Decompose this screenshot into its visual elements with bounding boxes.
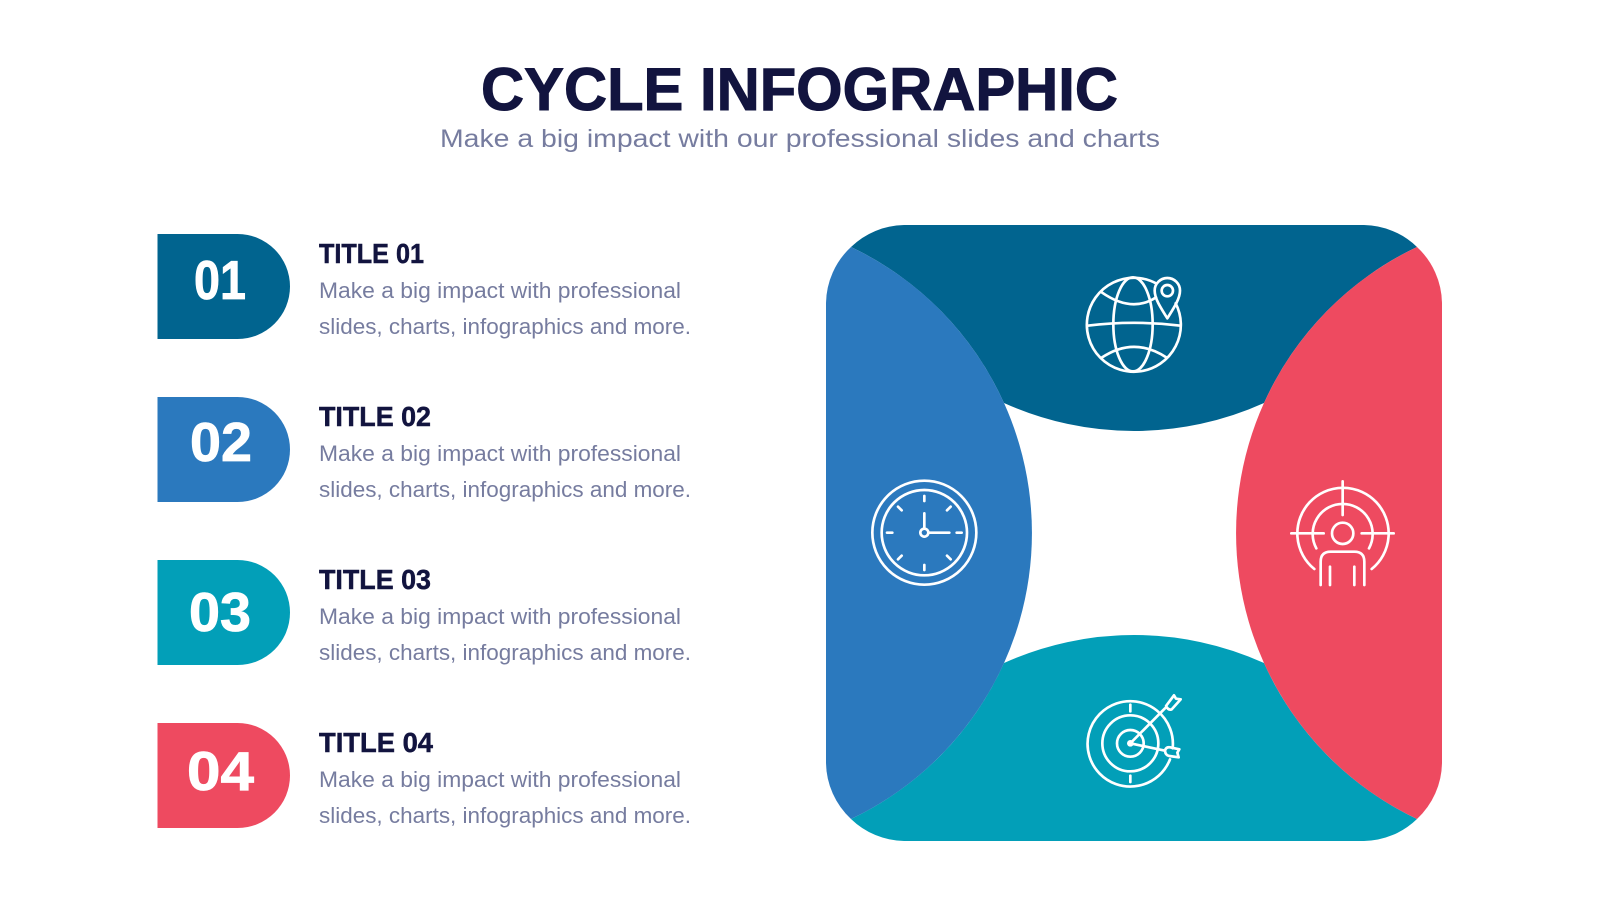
icon: globe with pin bbox=[1087, 277, 1181, 372]
text 03: Make a big impact with professional bbox=[319, 604, 681, 629]
list item 02 bbox=[158, 397, 691, 502]
segment: bottom bbox=[851, 635, 1417, 841]
heading 03: TITLE 03 bbox=[319, 564, 431, 595]
badge 03 bbox=[158, 560, 290, 665]
icon: dartboard with arrows bbox=[1088, 695, 1181, 787]
text 02: Make a big impact with professional bbox=[319, 441, 681, 466]
cycle diagram bbox=[826, 225, 1442, 841]
text 03: slides, charts, infographics and more. bbox=[319, 640, 691, 665]
list item 03 bbox=[158, 560, 691, 665]
segment: left bbox=[826, 247, 1032, 819]
heading 04: TITLE 04 bbox=[319, 727, 433, 758]
list item 01 bbox=[158, 234, 691, 339]
badge 02 bbox=[158, 397, 290, 502]
segment: right bbox=[1236, 247, 1442, 819]
segment: top bbox=[851, 225, 1417, 431]
heading 01: TITLE 01 bbox=[319, 238, 424, 269]
text 01: slides, charts, infographics and more. bbox=[319, 314, 691, 339]
text 01: Make a big impact with professional bbox=[319, 278, 681, 303]
icon: target person bbox=[1291, 481, 1394, 585]
subtitle: Make a big impact with our professional slides and charts bbox=[440, 125, 1160, 153]
badge 04 bbox=[158, 723, 290, 828]
title: CYCLE INFOGRAPHIC bbox=[481, 56, 1118, 123]
icon: clock bbox=[872, 481, 976, 585]
number 04: 04 bbox=[187, 740, 254, 802]
text 02: slides, charts, infographics and more. bbox=[319, 477, 691, 502]
text 04: slides, charts, infographics and more. bbox=[319, 803, 691, 828]
heading 02: TITLE 02 bbox=[319, 401, 431, 432]
number 02: 02 bbox=[190, 411, 252, 473]
number 03: 03 bbox=[189, 581, 251, 643]
number 01: 01 bbox=[194, 249, 246, 311]
list item 04 bbox=[158, 723, 691, 828]
badge 01 bbox=[158, 234, 290, 339]
text 04: Make a big impact with professional bbox=[319, 767, 681, 792]
